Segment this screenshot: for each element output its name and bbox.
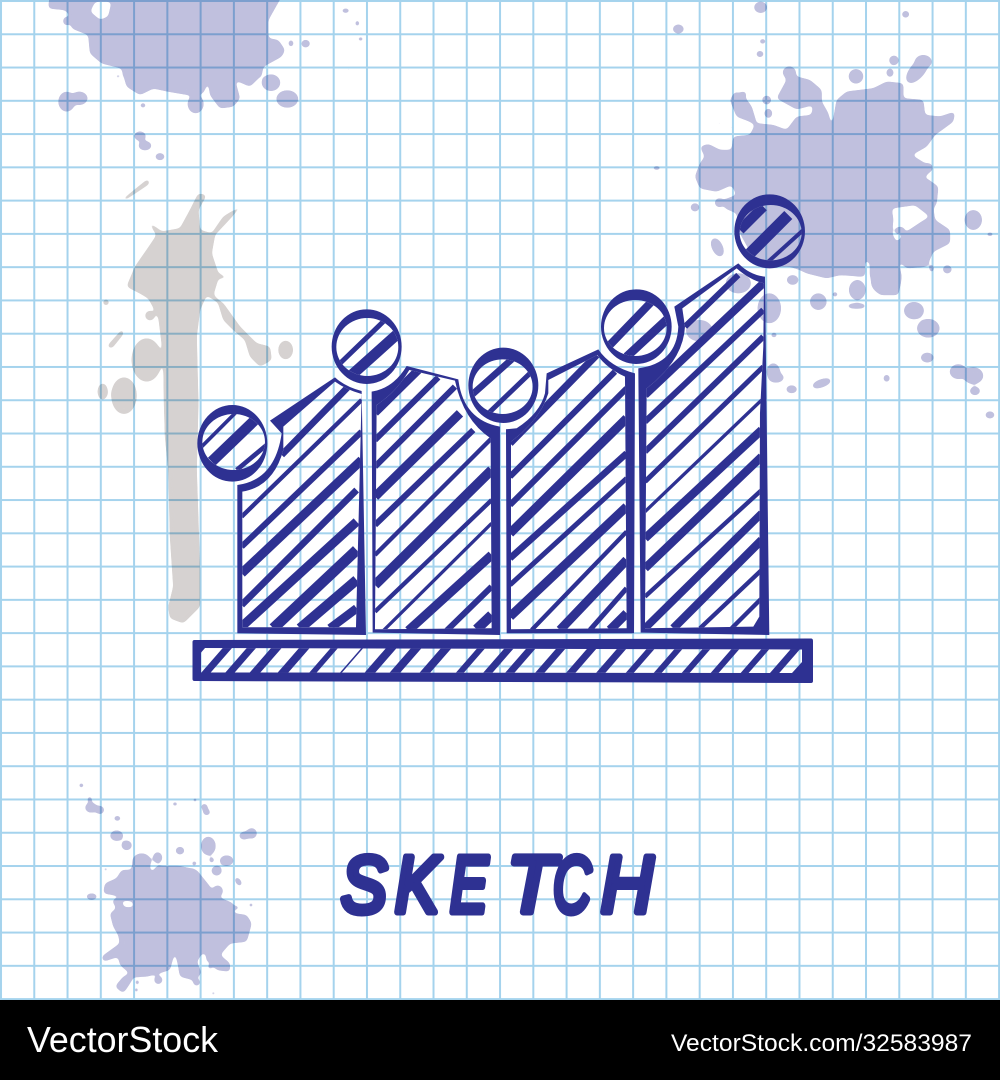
data point 2 — [332, 309, 402, 384]
sketch title: S — [341, 840, 387, 929]
sketch title: C — [553, 840, 592, 929]
data point 1 — [197, 405, 267, 482]
chart baseline — [176, 638, 813, 683]
footer bar — [0, 1000, 1000, 1080]
bar 2 outline — [372, 366, 500, 635]
sketch title: T — [507, 840, 560, 929]
bar 3 hatching — [510, 355, 627, 630]
ink stain: top right — [651, 2, 995, 419]
ink stain: bottom left — [78, 783, 257, 996]
bar 3 outline — [506, 349, 635, 633]
data point 4 — [601, 289, 672, 364]
bar 2 hatching — [375, 370, 492, 631]
ink stain: grey drip — [98, 179, 293, 623]
bar 1 with dot — [237, 377, 366, 635]
bar 4 — [638, 263, 769, 635]
sketch title: H — [601, 840, 653, 929]
brand name: VectorStock — [27, 1019, 219, 1060]
ink stain: top left — [48, 0, 375, 160]
sketch title: K — [395, 840, 442, 929]
bar 2 — [372, 366, 500, 635]
bar 1 outline — [237, 377, 366, 635]
bar 1 hatching — [242, 377, 362, 628]
sketch title — [341, 840, 653, 929]
bar 4 hatching — [645, 275, 765, 628]
data point 3 — [468, 348, 538, 423]
bar 4 outline — [638, 263, 769, 635]
data point 5 — [734, 194, 805, 268]
sketch title: E — [450, 840, 489, 929]
bar 3 — [506, 349, 635, 633]
image id: VectorStock.com/32583987 — [671, 1030, 972, 1057]
